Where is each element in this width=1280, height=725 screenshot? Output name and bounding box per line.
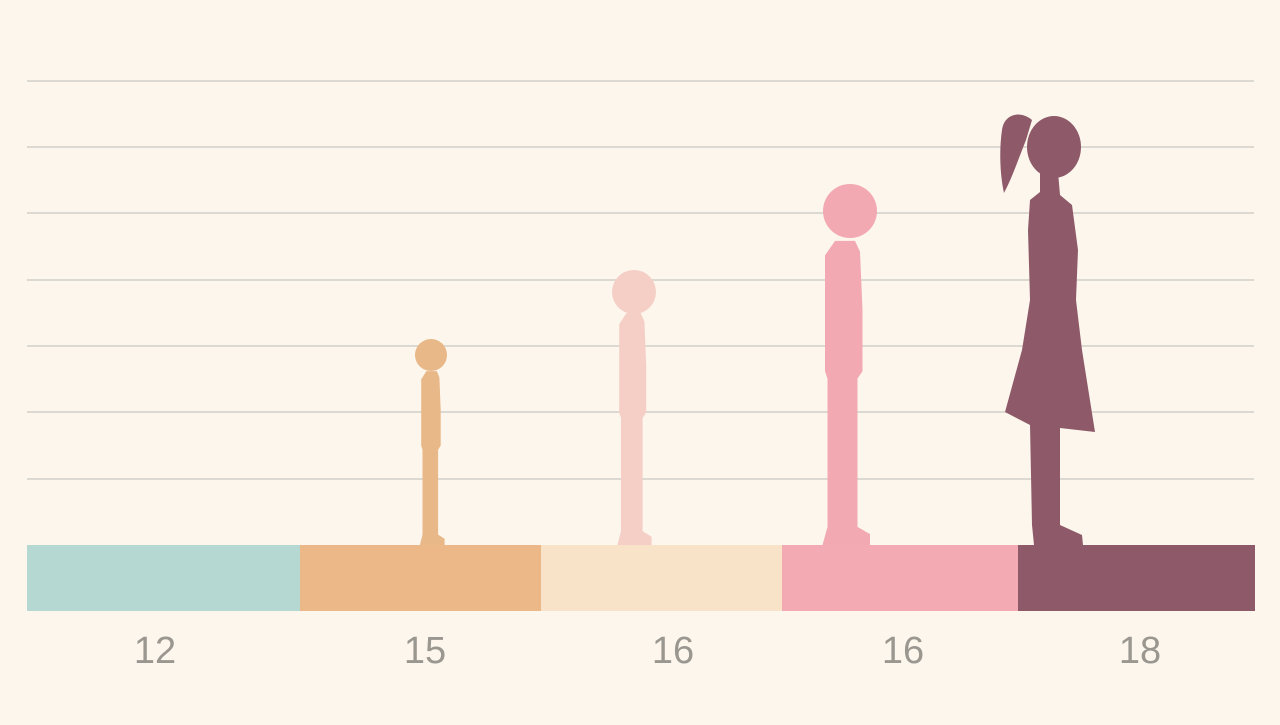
age labels <box>134 630 1161 672</box>
bar: age segments <box>27 545 1255 611</box>
silhouette: teen age 16 <box>822 184 877 545</box>
silhouette: boy age 16 <box>612 270 656 545</box>
silhouette: girl age 18 <box>1000 115 1095 545</box>
age labels: 16 <box>882 630 924 672</box>
age labels: 16 <box>652 630 694 672</box>
age labels: 18 <box>1119 630 1161 672</box>
silhouette: boy age 15 <box>415 339 447 545</box>
age labels: 15 <box>404 630 446 672</box>
age labels: 12 <box>134 630 176 672</box>
